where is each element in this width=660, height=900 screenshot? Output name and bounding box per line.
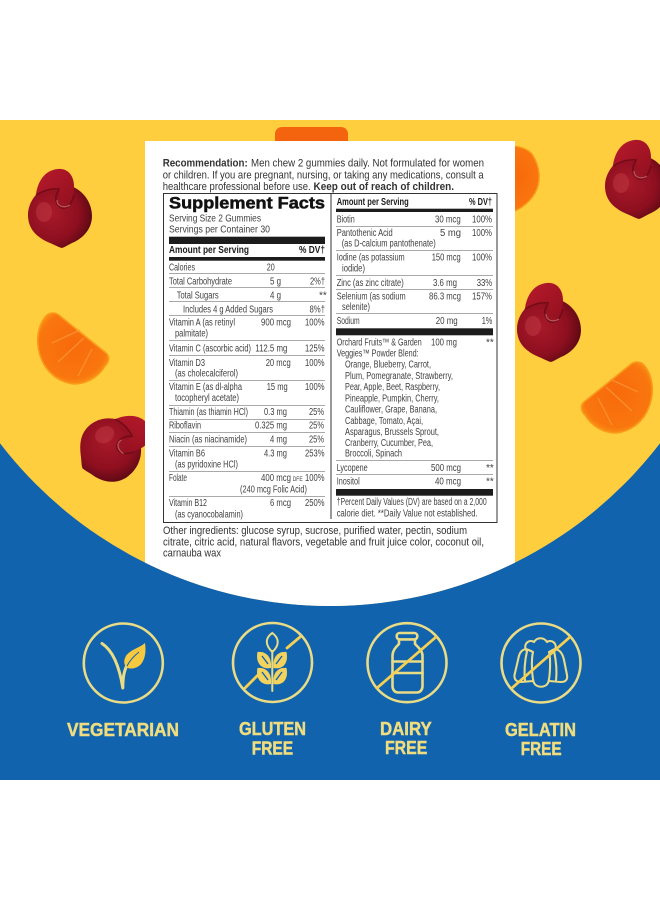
label: gluten free: [239, 719, 306, 758]
rows: nutrients: Vitamin A (as retinyl: [169, 318, 235, 329]
rows: nutrients: Riboflavin: [169, 421, 201, 432]
rows: nutrients: 100%: [305, 358, 325, 369]
powder blend: Broccoli, Spinach: [345, 449, 402, 460]
yellow dome: [0, 0, 660, 606]
rows: nutrients: 400 mcg: [261, 473, 291, 484]
rows: minerals and vitamins: Iodine (as potassium: [337, 253, 405, 264]
footnote: calorie diet. **Daily Value not established.: [337, 509, 478, 520]
rows: minerals and vitamins: iodide): [342, 264, 365, 275]
rows: nutrients: palmitate): [175, 329, 208, 340]
gummy: orange behind panel right: [500, 146, 539, 214]
rows: minerals and vitamins: Selenium (as sodium: [337, 291, 406, 302]
rows: minerals and vitamins: 157%: [472, 291, 492, 302]
powder blend: **: [486, 338, 494, 349]
icon: dairy free: [368, 623, 446, 702]
gummy: cherry top left: [28, 169, 92, 248]
rows: nutrients: Folate: [169, 473, 187, 484]
rows: minerals and vitamins: Zinc (as zinc citrate): [337, 278, 404, 289]
rows: nutrients: Calories: [169, 262, 195, 273]
rows: nutrients: 0.325 mg: [255, 421, 287, 432]
rows: minerals and vitamins: [336, 214, 493, 335]
rows: nutrients: 25%: [309, 421, 324, 432]
label: dairy free: FREE: [385, 738, 427, 758]
white label panel: [145, 141, 515, 611]
powder blend: Pear, Apple, Beet, Raspberry,: [345, 382, 440, 393]
rows: nutrients: Vitamin D3: [169, 358, 205, 369]
rows: nutrients: 25%: [309, 407, 324, 418]
rows: nutrients: 112.5 mg: [255, 343, 287, 354]
serving info: Serving Size 2 Gummies: [169, 214, 261, 225]
powder blend: 100 mg: [431, 338, 457, 349]
rows: nutrients: 2%†: [310, 276, 325, 287]
label: dairy free: [380, 719, 432, 758]
panel: right column: [336, 197, 494, 520]
other ingredients text: carnauba wax: [163, 548, 222, 560]
serving info: Servings per Container 30: [169, 225, 270, 236]
rows: nutrients: 20 mcg: [266, 358, 291, 369]
blue background: [0, 120, 660, 780]
rows: nutrients: 4 mg: [270, 435, 287, 446]
heading: Supplement Facts: Supplement Facts: [169, 194, 325, 212]
label: gelatin free: FREE: [521, 739, 562, 759]
rows: nutrients: (as cyanocobalamin): [175, 509, 243, 520]
rows: minerals and vitamins: Sodium: [337, 316, 360, 327]
other ingredients text: Other ingredients: glucose syrup, sucrose, purified water, pectin, sodium: [163, 525, 467, 537]
powder blend: Veggies™ Powder Blend:: [337, 349, 419, 360]
right column header: Amount per Serving: [337, 197, 409, 208]
rows: lycopene and inositol: **: [486, 463, 494, 474]
rows: minerals and vitamins: 150 mcg: [432, 253, 461, 264]
label: gluten free: FREE: [252, 738, 293, 758]
label: dairy free: DAIRY: [380, 719, 432, 739]
rows: nutrients: tocopheryl acetate): [175, 393, 239, 404]
powder blend: Orchard Fruits™ & Garden: [337, 338, 422, 349]
rows: nutrients: 253%: [305, 448, 325, 460]
rows: nutrients: 100%: [305, 382, 325, 393]
powder blend: Cauliflower, Grape, Banana,: [345, 405, 437, 416]
icon: vegetarian: [84, 624, 163, 702]
rows: nutrients: Niacin (as niacinamide): [169, 435, 247, 446]
gummy: orange left: [38, 313, 109, 384]
label: vegetarian: VEGETARIAN: [67, 720, 179, 740]
rows: nutrients: 125%: [305, 343, 325, 354]
rows: lycopene and inositol: **: [486, 477, 494, 488]
rows: minerals and vitamins: 20 mg: [436, 316, 458, 327]
rows: nutrients: Thiamin (as thiamin HCl): [169, 407, 248, 418]
label: gluten free: GLUTEN: [239, 719, 306, 739]
rows: nutrients: (as pyridoxine HCl): [175, 459, 238, 470]
rows: nutrients: 250%: [305, 498, 325, 509]
top white band: [0, 0, 660, 120]
gummy: cherry middle right: [517, 283, 581, 362]
rows: nutrients: 4 g: [270, 291, 281, 302]
recommendation text: or children. If you are pregnant, nursing, or taking any medications, consult a: [163, 169, 484, 181]
rows: minerals and vitamins: 100%: [472, 253, 492, 264]
rows: nutrients: 6 mcg: [270, 498, 291, 509]
powder blend: Cranberry, Cucumber, Pea,: [345, 438, 433, 449]
rows: nutrients: 5 g: [270, 276, 281, 287]
rows: lycopene and inositol: Lycopene: [337, 463, 368, 474]
rows: nutrients: 4.3 mg: [264, 448, 287, 460]
powder blend: Cabbage, Tomato, Açai,: [345, 416, 423, 427]
rows: nutrients: 20: [267, 262, 275, 273]
rows: minerals and vitamins: 100%: [472, 228, 492, 239]
right column header: % DV†: [469, 197, 492, 208]
serving info: [169, 214, 270, 236]
right column header: [336, 197, 493, 212]
recommendation text: Recommendation:: [163, 158, 248, 170]
rows: minerals and vitamins: Pantothenic Acid: [337, 228, 393, 239]
label: gelatin free: [505, 720, 576, 759]
infographic: [0, 120, 660, 780]
powder blend: Asparagus, Brussels Sprout,: [345, 427, 439, 438]
icon: gluten free: [233, 623, 312, 702]
rows: nutrients: [169, 262, 327, 520]
gummy: cherry top right: [605, 140, 660, 219]
rows: nutrients: 8%†: [310, 305, 325, 316]
other ingredients text: citrate, citric acid, natural flavors, vegetable and fruit juice color, coconut oil,: [163, 537, 484, 549]
rows: minerals and vitamins: 100%: [472, 214, 492, 225]
panel: left column: [169, 194, 327, 520]
rows: minerals and vitamins: Biotin: [337, 214, 355, 225]
rows: minerals and vitamins: 30 mcg: [435, 214, 461, 225]
rows: nutrients: Vitamin C (ascorbic acid): [169, 343, 251, 354]
rows: nutrients: (as cholecalciferol): [175, 369, 238, 380]
other ingredients text: [163, 525, 484, 560]
label: gelatin free: GELATIN: [505, 720, 576, 740]
rows: nutrients: Vitamin E (as dl-alpha: [169, 382, 242, 393]
powder blend: Pineapple, Pumpkin, Cherry,: [345, 394, 439, 405]
recommendation text: Keep out of reach of children.: [314, 181, 454, 193]
rows: minerals and vitamins: 86.3 mcg: [429, 291, 461, 302]
recommendation text: Men chew 2 gummies daily. Not formulated for women: [251, 158, 484, 170]
rows: lycopene and inositol: [336, 463, 494, 496]
rows: nutrients: 15 mg: [267, 382, 288, 393]
rows: nutrients: Total Sugars: [177, 291, 219, 302]
footnote: †Percent Daily Values (DV) are based on a 2,000: [337, 497, 487, 508]
gummy: orange right: [581, 362, 652, 433]
rows: nutrients: (240 mcg Folic Acid): [240, 485, 307, 496]
powder blend: Plum, Pomegranate, Strawberry,: [345, 371, 453, 382]
header bar: % DV†: [299, 245, 325, 256]
rows: nutrients: 900 mcg: [261, 318, 291, 329]
rows: minerals and vitamins: selenite): [342, 302, 370, 313]
rows: nutrients: Vitamin B6: [169, 448, 205, 460]
recommendation text: healthcare professional before use.: [163, 181, 311, 193]
rows: nutrients: 0.3 mg: [264, 407, 287, 418]
rows: lycopene and inositol: 40 mcg: [435, 477, 461, 488]
rows: nutrients: 100%: [305, 318, 325, 329]
powder blend: [336, 338, 494, 460]
rows: nutrients: Total Carbohydrate: [169, 276, 232, 287]
rows: lycopene and inositol: Inositol: [337, 477, 360, 488]
header bar: [169, 237, 325, 261]
header bar: Amount per Serving: [169, 245, 249, 256]
rows: nutrients: Vitamin B12: [169, 498, 207, 509]
rows: nutrients: Includes 4 g Added Sugars: [183, 305, 273, 316]
rows: nutrients: **: [319, 291, 327, 302]
icon: gelatin free: [502, 624, 580, 702]
recommendation text: [163, 158, 484, 193]
rows: lycopene and inositol: 500 mcg: [431, 463, 461, 474]
supplement facts box: [164, 194, 497, 522]
rows: nutrients: DFE: [293, 476, 303, 483]
rows: minerals and vitamins: 33%: [477, 278, 492, 289]
rows: nutrients: 25%: [309, 435, 324, 446]
rows: minerals and vitamins: 3.6 mg: [433, 278, 457, 289]
rows: minerals and vitamins: 5 mg: [440, 228, 461, 239]
rows: minerals and vitamins: 1%: [482, 316, 492, 327]
rows: nutrients: 100%: [305, 473, 325, 484]
gummy: cherry lower left: [65, 399, 166, 494]
footnote: [337, 497, 487, 520]
gummy: top orange: [275, 127, 348, 157]
rows: minerals and vitamins: (as D-calcium pantothenate): [342, 239, 436, 250]
powder blend: Orange, Blueberry, Carrot,: [345, 359, 431, 370]
